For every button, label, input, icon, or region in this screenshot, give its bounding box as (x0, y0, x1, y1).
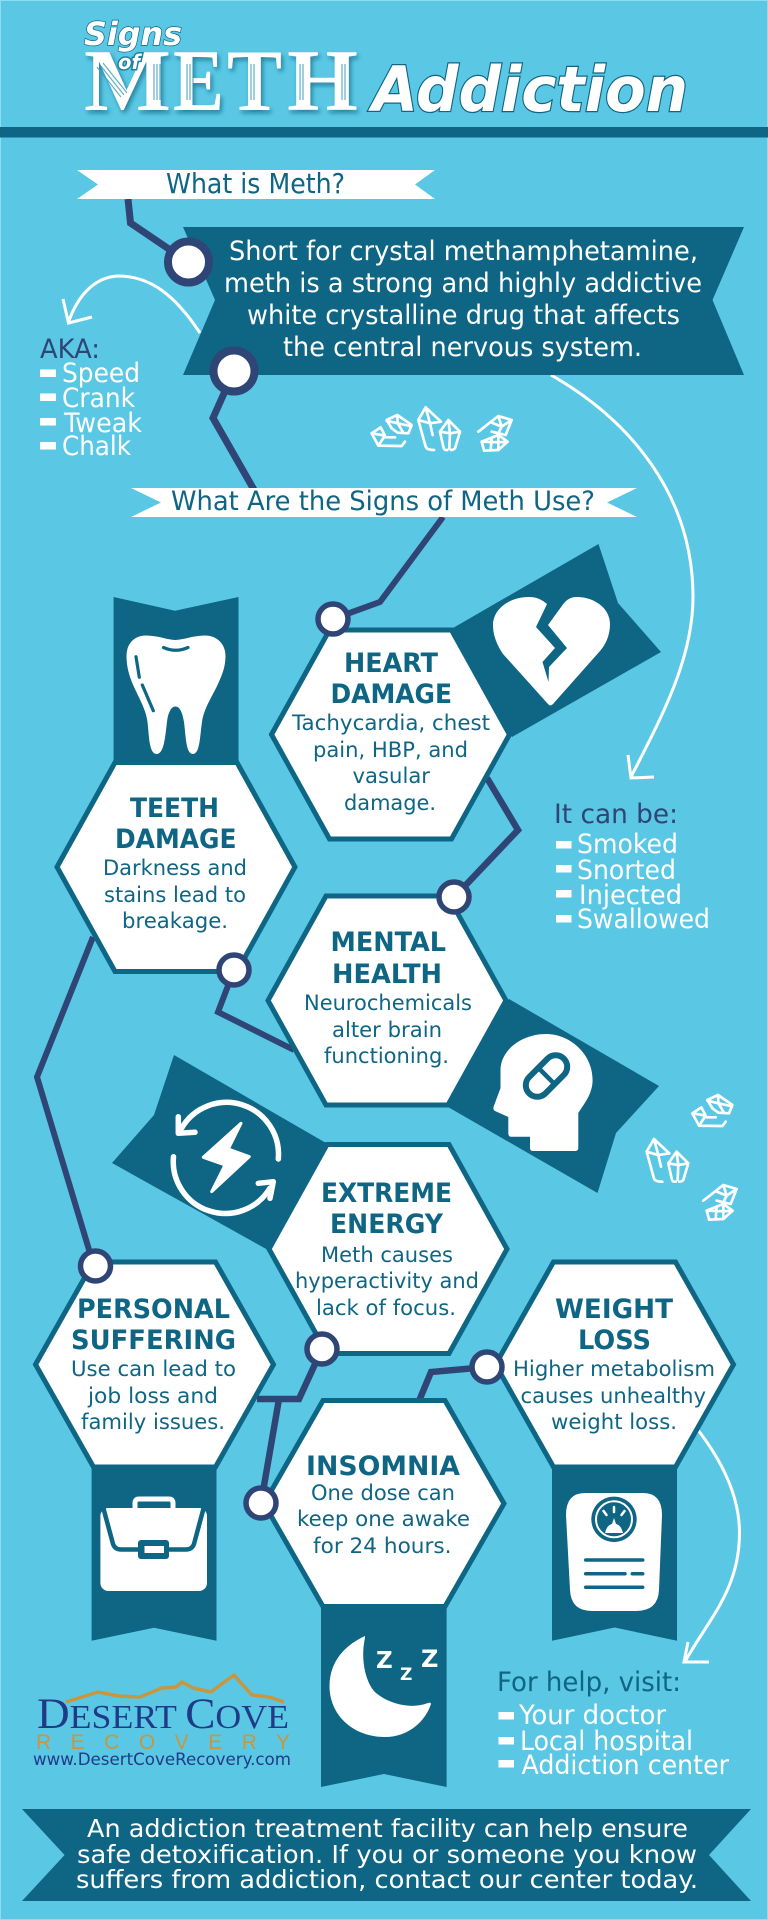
call to action text: suffers from addiction, contact our center today. (76, 1865, 698, 1894)
body text: functioning. (324, 1044, 449, 1069)
icon: moon with zzz (330, 1636, 438, 1737)
heading (555, 1294, 673, 1356)
panel: mental health (268, 896, 659, 1193)
panel: definition banner (183, 227, 744, 375)
title word: METH: H (287, 33, 358, 130)
connector: teeth to mental (218, 970, 294, 1050)
heading: INSOMNIA (306, 1451, 460, 1482)
hexagon (269, 1144, 507, 1354)
text block: AKA list: Speed (62, 358, 140, 389)
arrow: to it can be (551, 375, 693, 778)
title word: Addiction: Addiction (367, 53, 688, 126)
body text (297, 1481, 470, 1559)
heading: WEIGHT (555, 1294, 673, 1325)
call to action text: safe detoxification. If you or someone you know (77, 1840, 697, 1869)
icon: head with pill (493, 1034, 593, 1151)
definition text: white crystalline drug that affects (247, 300, 680, 331)
text block: For help list: Your doctor (518, 1700, 666, 1731)
body text (291, 711, 490, 816)
node: extreme (307, 1334, 337, 1364)
body text: weight loss. (551, 1410, 677, 1435)
node: personal (80, 1251, 110, 1281)
icon: crystals top (372, 407, 512, 451)
connector: teeth to personal (37, 937, 93, 1253)
banner: What is Meth? (77, 168, 435, 200)
heading: PERSONAL (77, 1294, 230, 1325)
node: teeth (219, 955, 249, 985)
node: definition top (168, 242, 209, 282)
body text: hyperactivity and (295, 1269, 479, 1294)
title word: METH (84, 33, 358, 130)
node: mental (439, 882, 469, 912)
icon: moon with zzz: Z (400, 1665, 412, 1685)
heading (330, 648, 452, 710)
body text: Neurochemicals (304, 991, 472, 1016)
ribbon (448, 999, 659, 1193)
connector: to signs banner (213, 371, 257, 495)
body text: family issues. (81, 1410, 225, 1435)
panel: heart damage (272, 544, 661, 839)
heading: MENTAL (330, 927, 446, 958)
node: weight (472, 1352, 502, 1382)
ribbon (453, 544, 661, 737)
node: heart (318, 604, 348, 634)
heading: HEART (344, 648, 438, 679)
text block: AKA list: Tweak (63, 408, 143, 439)
text block: It can be list: Injected (579, 880, 682, 911)
node: insomnia (246, 1488, 276, 1518)
text block: AKA list (40, 334, 143, 462)
arrow: to help list (684, 1430, 740, 1662)
body text: job loss and (87, 1384, 218, 1409)
body text: Higher metabolism (513, 1357, 715, 1382)
arrow: to AKA (63, 276, 200, 333)
heading: TEETH (130, 793, 219, 824)
text block: AKA list: Crank (62, 383, 136, 414)
icon: moon with zzz: Z (376, 1648, 393, 1674)
connector: heart to mental (454, 778, 518, 897)
definition text: Short for crystal methamphetamine, (229, 236, 698, 267)
body text: Meth causes (321, 1243, 453, 1268)
ribbon (92, 1465, 216, 1641)
banner: What Are the Signs of Meth Use? (131, 486, 637, 517)
logo mountains (66, 1675, 284, 1702)
hexagon (36, 1262, 274, 1467)
icon: crystals right (647, 1095, 737, 1220)
text block: AKA list: Chalk (62, 431, 132, 462)
heading: HEALTH (332, 959, 442, 990)
heading (115, 793, 236, 855)
ribbon (114, 597, 238, 765)
body text (295, 1243, 479, 1321)
text block: It can be list (554, 799, 710, 935)
title word: Signs: Signs (84, 15, 182, 53)
text block: AKA list: AKA: (40, 334, 100, 365)
hexagon (268, 896, 506, 1105)
heading (321, 1178, 452, 1240)
body text: causes unhealthy (520, 1384, 706, 1409)
body text: lack of focus. (316, 1296, 456, 1321)
logo: Desert Cove Recovery (33, 1675, 291, 1769)
text block: For help list: For help, visit: (497, 1667, 681, 1698)
title (84, 15, 688, 130)
logo subtitle: RECOVERY (36, 1731, 290, 1754)
icon: weighing scale (566, 1493, 662, 1611)
panel: insomnia (264, 1400, 504, 1787)
body text: damage. (344, 791, 436, 816)
heading (71, 1294, 236, 1356)
title word: METH: T (227, 33, 282, 130)
call to action text (76, 1814, 698, 1894)
ribbon (552, 1465, 677, 1641)
hexagon (57, 762, 295, 972)
title word: METH: E (173, 33, 224, 130)
icon: moon with zzz: Z (421, 1645, 438, 1673)
node: definition bottom (214, 350, 254, 392)
definition text: the central nervous system. (283, 332, 642, 363)
text block: It can be list: Snorted (577, 855, 676, 886)
heading (330, 927, 446, 990)
connector: extreme to personal and insomnia (257, 1349, 322, 1503)
text block: For help list: Local hospital (520, 1726, 693, 1757)
text block: It can be list: It can be: (554, 799, 678, 830)
body text (513, 1357, 715, 1435)
hexagon (264, 1400, 504, 1606)
text block: It can be list: Smoked (577, 829, 678, 860)
body text: Use can lead to (71, 1357, 236, 1382)
hexagon (272, 630, 510, 839)
ribbon (321, 1604, 447, 1787)
body text (71, 1357, 236, 1435)
body text (304, 991, 472, 1069)
hexagon (496, 1262, 734, 1467)
connector: weight to insomnia (419, 1367, 487, 1401)
connector: signs to heart (333, 517, 443, 619)
text block: For help list: Addiction center (522, 1750, 729, 1781)
text block: For help list (497, 1667, 729, 1781)
body text: for 24 hours. (313, 1534, 452, 1559)
icon: tooth (126, 636, 226, 754)
title word: of: of (118, 50, 142, 74)
logo url: www.DesertCoveRecovery.com (33, 1750, 291, 1769)
body text: One dose can (311, 1481, 455, 1506)
call to action text: An addiction treatment facility can help ensure (87, 1814, 688, 1843)
header divider (0, 127, 768, 138)
banner: call to action (22, 1809, 751, 1901)
body text: alter brain (332, 1018, 442, 1043)
body text: breakage. (122, 909, 228, 934)
banner text: What Are the Signs of Meth Use? (171, 486, 595, 517)
body text (103, 856, 247, 934)
text block: It can be list: Swallowed (577, 904, 710, 935)
heading: ENERGY (330, 1209, 444, 1240)
icon: broken heart (493, 597, 610, 706)
title stripes (97, 63, 345, 100)
body text: stains lead to (104, 883, 246, 908)
heading: DAMAGE (115, 824, 236, 855)
body text: Tachycardia, chest (291, 711, 490, 736)
definition text: meth is a strong and highly addictive (224, 268, 702, 299)
panel: weight loss (496, 1262, 734, 1641)
icon: energy cycle (173, 1102, 279, 1213)
title word: METH: M (84, 33, 171, 130)
heading: DAMAGE (330, 679, 452, 710)
panel: teeth damage (57, 597, 295, 972)
body text: keep one awake (297, 1507, 470, 1532)
heading: LOSS (578, 1325, 651, 1356)
heading: EXTREME (321, 1178, 452, 1209)
banner text: What is Meth? (166, 168, 345, 200)
panel: personal suffering (36, 1262, 274, 1641)
icon: briefcase (100, 1499, 207, 1591)
body text: pain, HBP, and (313, 738, 468, 763)
connector: what is meth (128, 199, 188, 262)
body text: Darkness and (103, 856, 247, 881)
heading: SUFFERING (71, 1325, 236, 1356)
body text: vasular (352, 764, 430, 789)
definition text (224, 236, 702, 363)
ribbon (112, 1055, 326, 1250)
logo wordmark: DESERT COVE (37, 1691, 289, 1738)
panel: extreme energy (112, 1055, 507, 1354)
